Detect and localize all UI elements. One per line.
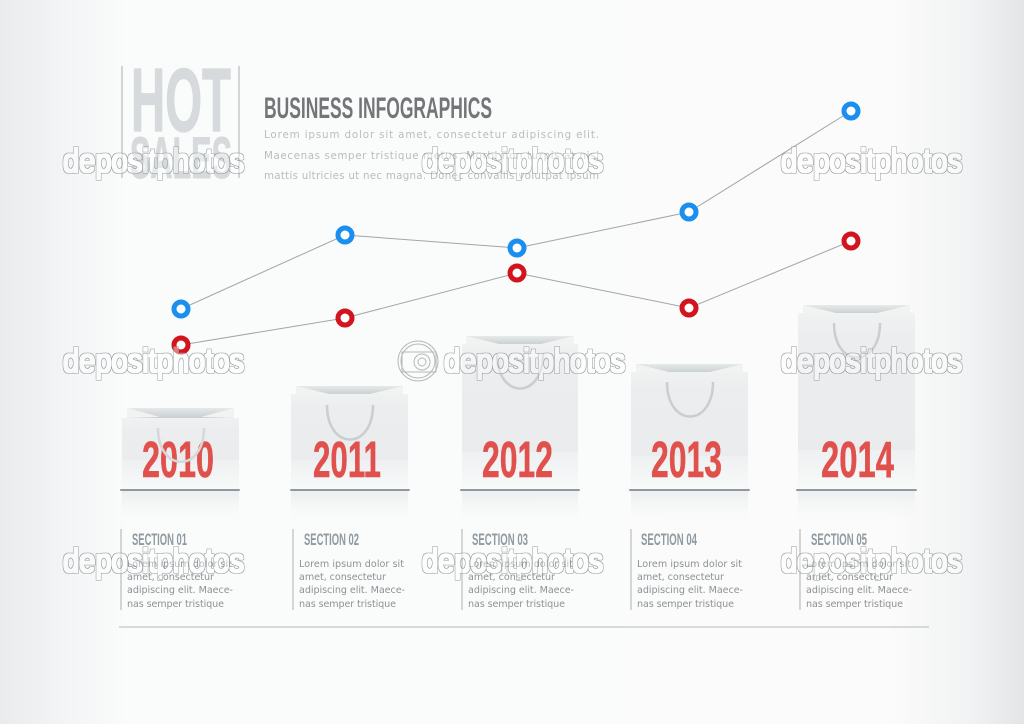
watermarks: depositphotos <box>781 342 962 379</box>
section 04: SECTION 04 <box>641 531 697 549</box>
logo: hot sales <box>122 51 239 191</box>
section 04: Lorem ipsum dolor sit <box>637 559 742 570</box>
section 02: adipiscing elit. Maece- <box>299 585 405 596</box>
bag 2011: 2011 <box>313 431 381 488</box>
watermarks: depositphotos <box>781 542 962 579</box>
section 05: SECTION 05 <box>811 531 867 549</box>
watermarks: depositphotos <box>444 342 625 379</box>
section 04: nas semper tristique <box>637 599 734 610</box>
watermarks: depositphotos <box>63 542 244 579</box>
bag 2014: 2014 <box>821 431 894 488</box>
section 05: adipiscing elit. Maece- <box>806 585 912 596</box>
logo: hot sales: HOT <box>131 51 231 151</box>
line chart <box>174 104 858 352</box>
section 03: adipiscing elit. Maece- <box>468 585 574 596</box>
watermarks <box>63 142 962 579</box>
baseline rule <box>119 626 929 628</box>
bag 2014 <box>796 305 917 527</box>
icon: camera logo <box>398 341 438 381</box>
section 01: adipiscing elit. Maece- <box>127 585 233 596</box>
section 04: adipiscing elit. Maece- <box>637 585 743 596</box>
section 03: Lorem ipsum dolor sit <box>468 559 573 570</box>
section 03 <box>462 529 574 610</box>
section 03: amet, consectetur <box>468 572 555 583</box>
section 05: Lorem ipsum dolor sit <box>806 559 911 570</box>
watermarks: depositphotos <box>781 142 962 179</box>
bag 2012: 2012 <box>482 431 553 488</box>
bag 2012 <box>460 336 580 527</box>
section 05: amet, consectetur <box>806 572 893 583</box>
bag 2011 <box>290 386 410 527</box>
section 03: SECTION 03 <box>472 531 528 549</box>
section 02: amet, consectetur <box>299 572 386 583</box>
bag 2010: 2010 <box>142 431 214 488</box>
section 01: nas semper tristique <box>127 599 224 610</box>
section 01: SECTION 01 <box>132 531 187 549</box>
logo: hot sales: SALES <box>130 126 232 191</box>
section 04 <box>631 529 743 610</box>
section 02: nas semper tristique <box>299 599 396 610</box>
bag 2013: 2013 <box>651 431 722 488</box>
watermarks: depositphotos <box>63 342 244 379</box>
section 01: amet, consectetur <box>127 572 214 583</box>
watermarks: depositphotos <box>422 542 603 579</box>
heading: BUSINESS INFOGRAPHICS <box>264 92 492 125</box>
section 04: amet, consectetur <box>637 572 724 583</box>
intro text: Maecenas semper tristique metus. Morbi non turpis at nisi <box>264 150 599 162</box>
section 03: nas semper tristique <box>468 599 565 610</box>
blue series <box>174 104 858 316</box>
section 05 <box>800 529 912 610</box>
intro text: Lorem ipsum dolor sit amet, consectetur adipiscing elit. <box>264 129 599 141</box>
red series <box>174 234 858 352</box>
watermarks: depositphotos <box>422 142 603 179</box>
section 01 <box>121 529 233 610</box>
section 01: Lorem ipsum dolor sit <box>127 559 232 570</box>
section 05: nas semper tristique <box>806 599 903 610</box>
bag 2013 <box>629 364 750 527</box>
intro text: mattis ultricies ut nec magna. Donec convallis volutpat ipsum <box>264 170 599 182</box>
section 02: Lorem ipsum dolor sit <box>299 559 404 570</box>
watermarks: depositphotos <box>63 142 244 179</box>
intro text <box>264 129 599 182</box>
section 02 <box>293 529 405 610</box>
section 02: SECTION 02 <box>304 531 359 549</box>
bag 2010 <box>120 408 240 527</box>
